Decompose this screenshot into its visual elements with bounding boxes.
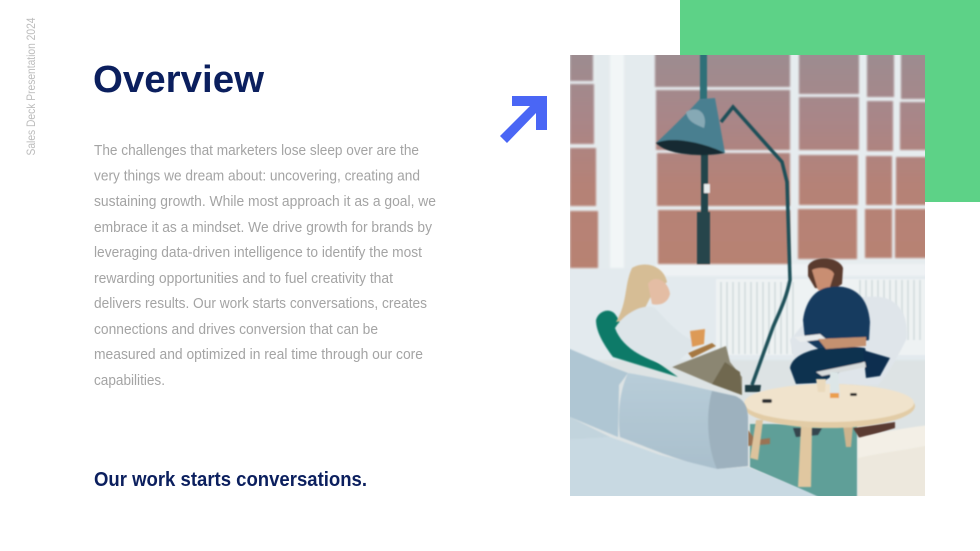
photo: meeting in a bright office [560,45,935,505]
body paragraph [94,142,436,389]
icon: arrow up-right [500,96,547,143]
photo foreground ottoman [857,426,925,496]
green accent block [680,0,980,202]
photo brick window panes [570,50,931,268]
photo radiator [716,279,926,355]
tagline: Our work starts conversations. [94,469,367,491]
photo coffee table [743,372,915,487]
photo wall and window frame [560,45,935,505]
photo green armchair [596,311,678,377]
title: Overview [93,59,264,101]
body paragraph: connections and drives conversion that can be [94,321,378,338]
body paragraph: very things we dream about: uncovering, creating and [94,168,420,184]
body paragraph: leveraging data-driven intelligence to identify the most [94,244,423,261]
body paragraph: sustaining growth. While most approach it as a goal, we [94,193,436,210]
body paragraph: rewarding opportunities and to fuel creativity that [94,270,394,287]
photo rug [750,424,857,500]
body paragraph: capabilities. [94,372,165,389]
photo woman with blonde hair [615,264,742,395]
body paragraph: The challenges that marketers lose sleep over are the [94,142,419,159]
body paragraph: measured and optimized in real time through our core [94,346,423,363]
photo white armchair [790,297,906,355]
photo grey sofa [560,349,825,500]
photo floor lamp [656,98,790,392]
body paragraph: delivers results. Our work starts conversations, creates [94,295,427,312]
body paragraph: embrace it as a mindset. We drive growth for brands by [94,219,432,236]
photo woman in navy [790,258,890,384]
photo street pole [697,50,710,264]
photo shoes [748,422,895,446]
